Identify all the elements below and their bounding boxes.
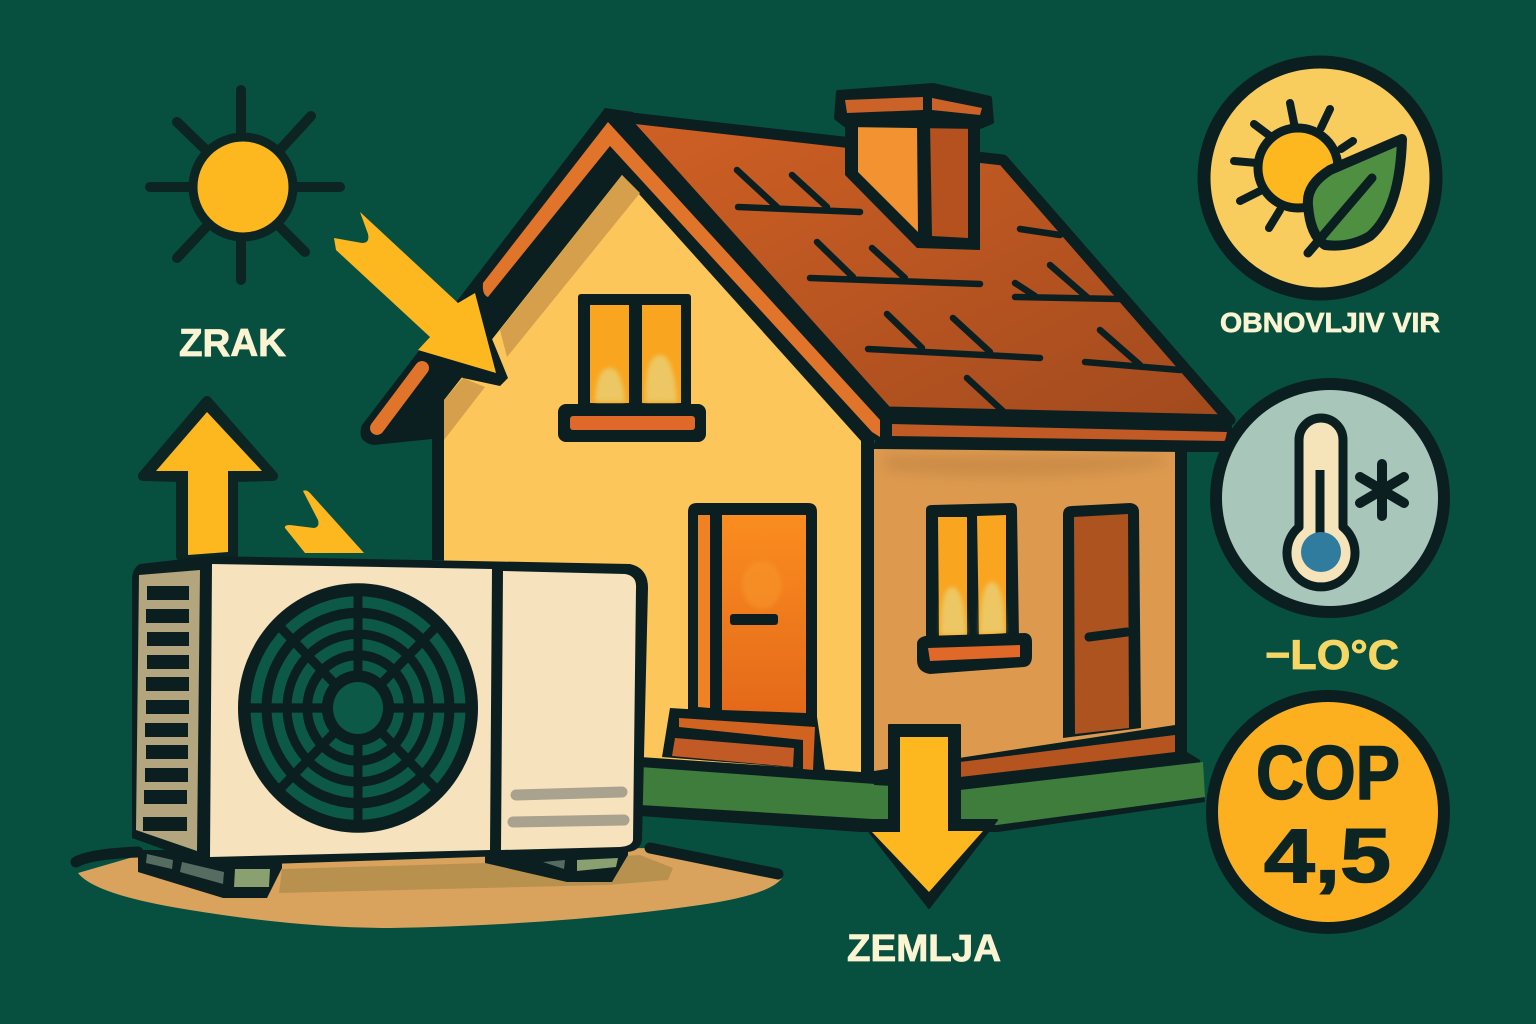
attic window [558,294,706,442]
side door [1063,503,1141,738]
right service panel [501,571,636,850]
icon: snowflake [1360,464,1404,516]
label: ZEMLJA: ZEMLJA [847,928,1001,970]
arrow: sun heat into house [334,212,508,386]
gable trim [377,122,880,437]
front wall [444,175,861,772]
side window [917,503,1032,674]
louvre slots [143,593,189,824]
stoop [662,708,825,770]
label: ZRAK: ZRAK [179,322,286,365]
arrow: small air intake [285,490,364,553]
label: 4,5: 4,5 [1264,814,1391,899]
outdoor heat pump unit [132,556,648,898]
arrow: ground heat down [860,725,997,908]
shingles [737,170,1180,413]
unit feet [138,845,628,898]
icon: leaf [1308,139,1402,253]
arrow: air rising up [143,401,273,556]
label: temperature: −LO°C [1265,631,1399,678]
label: OBNOVLJIV VIR: OBNOVLJIV VIR [1220,307,1440,338]
ground strip right [960,762,1205,825]
unit body [132,556,648,866]
badge: renewable source [1204,62,1436,294]
service panel lines [513,792,624,822]
front door [662,503,825,770]
chimney [836,85,992,250]
ground shadow pad [76,848,782,928]
front panel [210,564,492,857]
gable underside [360,108,895,560]
wall shadow [444,175,640,440]
label: COP: COP [1256,731,1400,816]
icon: thermometer [1287,418,1355,587]
badge: cold temperature [1216,384,1444,612]
side wall [870,447,1178,772]
main roof [622,117,1230,420]
fan grille [238,583,478,833]
side wall edges and base [861,440,1205,832]
badge: COP value [1212,696,1444,928]
eave band [873,410,1232,452]
ground strip left [640,757,889,832]
side louvre panel [136,570,200,851]
icon: sun [150,90,340,280]
wall shading under eave [885,455,1165,476]
icon: sun [1234,103,1353,228]
house [360,85,1232,832]
wall base band [960,735,1175,777]
